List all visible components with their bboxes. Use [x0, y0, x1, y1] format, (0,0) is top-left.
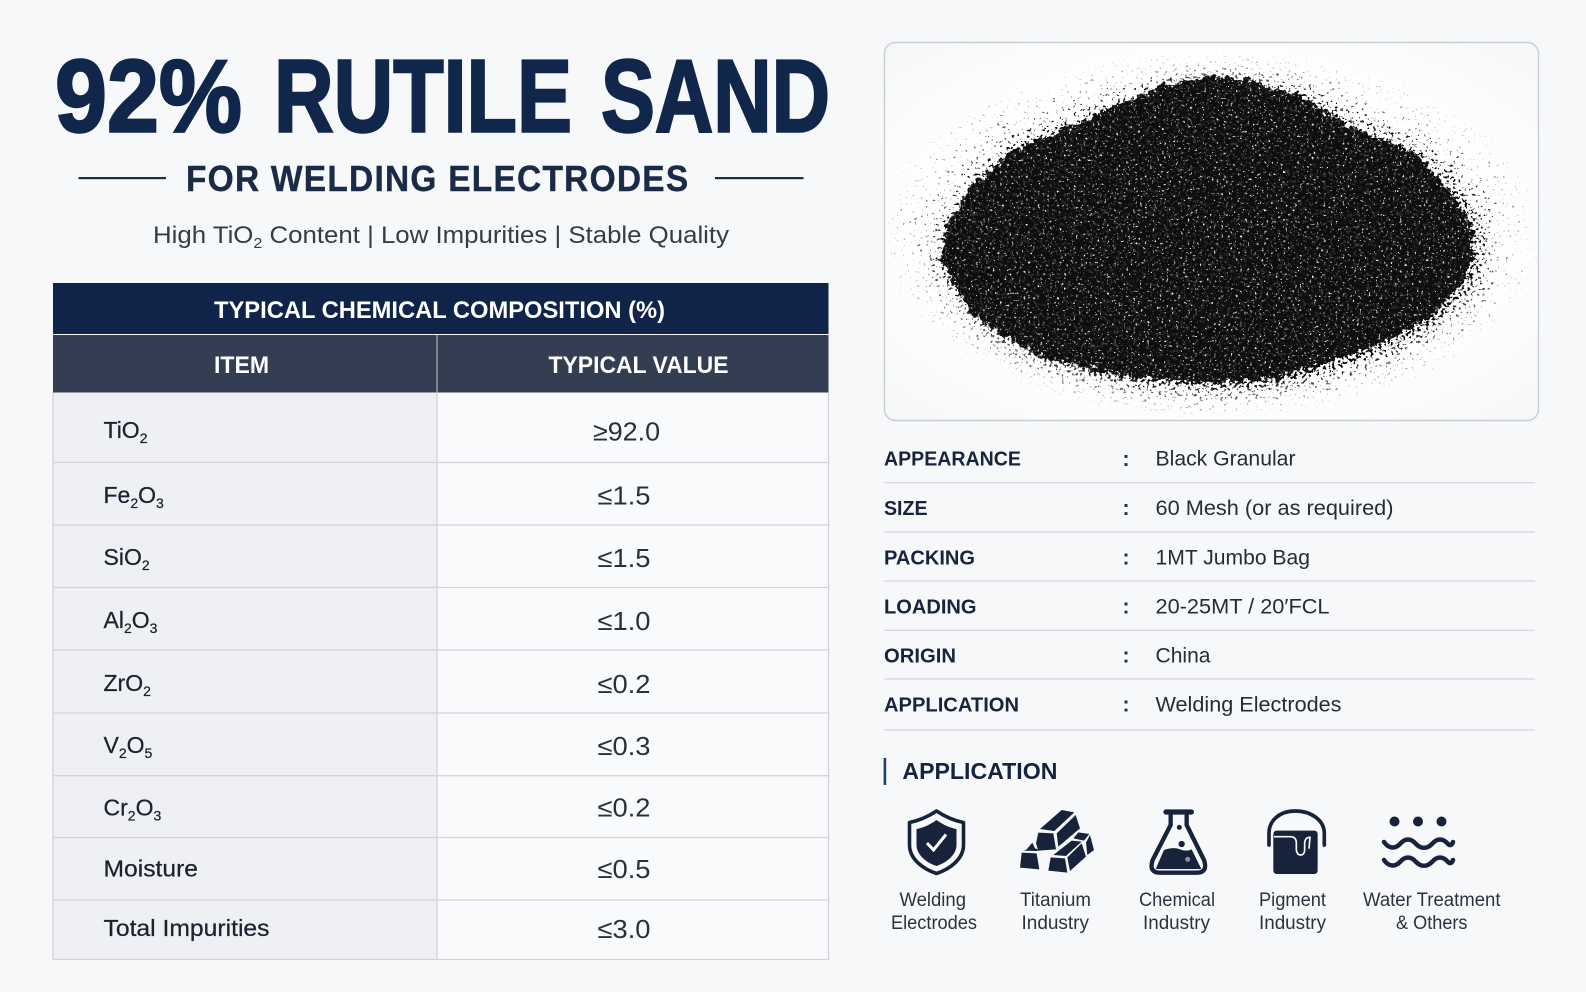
- row: Al2O3: Al: [104, 607, 124, 633]
- row: TiO2: ≥92.0: [593, 416, 660, 446]
- row: Al2O3: ≤1.0: [598, 606, 650, 636]
- row: V2O5: ≤0.3: [598, 731, 650, 761]
- item: pigment industry: Pigment: [1259, 890, 1327, 911]
- application heading: APPLICATION: [902, 758, 1057, 784]
- scattered grains: [948, 84, 1478, 384]
- subtitle with side rules: FOR WELDING ELECTRODES: [186, 160, 688, 199]
- row: TiO2: 2: [140, 430, 148, 446]
- row: Fe2O3: Fe: [104, 482, 130, 508]
- spec: appearance: APPEARANCE: [884, 449, 1021, 471]
- row: Al2O3: 2: [124, 620, 132, 636]
- title: [55, 38, 830, 154]
- title: SAND: [601, 38, 830, 154]
- row: ZrO2: 2: [143, 683, 151, 699]
- row: V2O5: V: [104, 732, 119, 758]
- spec: appearance: Black Granular: [1156, 448, 1296, 471]
- spec: size: :: [1122, 497, 1130, 520]
- table column headers: ITEM: [214, 352, 269, 379]
- spec: origin: China: [1156, 644, 1211, 667]
- table title bar: [53, 283, 828, 334]
- spec: appearance: [884, 448, 1296, 471]
- item: welding electrodes: Electrodes: [891, 913, 977, 934]
- tagline: 2: [253, 235, 262, 252]
- row: Fe2O3: 3: [156, 495, 164, 511]
- panel: chemical composition table: [53, 283, 828, 960]
- panel: product specifications: [884, 448, 1535, 730]
- spec: loading: :: [1122, 595, 1130, 618]
- item: chemical industry: Chemical: [1139, 890, 1215, 911]
- spec: application: [884, 694, 1342, 717]
- icon: flask: [1151, 812, 1205, 873]
- table column headers: TYPICAL VALUE: [548, 352, 728, 379]
- row: SiO2: ≤1.5: [598, 543, 650, 573]
- row: SiO2: [104, 543, 650, 573]
- title: RUTILE: [274, 38, 572, 154]
- row: Cr2O3: Cr: [104, 795, 128, 821]
- spec dividers: [884, 483, 1535, 730]
- row: V2O5: [104, 731, 650, 761]
- sand pile: [940, 76, 1475, 383]
- spec: origin: ORIGIN: [884, 645, 956, 667]
- spec: appearance: :: [1122, 448, 1130, 471]
- icon: shield with check: [910, 811, 964, 874]
- row: TiO2: TiO: [104, 417, 140, 443]
- row: Moisture: Moisture: [104, 856, 198, 882]
- row: SiO2: SiO: [104, 544, 142, 570]
- row: TiO2: [104, 416, 660, 446]
- spec: packing: PACKING: [884, 547, 975, 569]
- row: Al2O3: 3: [150, 620, 158, 636]
- item: water treatment: & Others: [1396, 913, 1468, 934]
- row: Moisture: [104, 854, 650, 884]
- item: chemical industry: Industry: [1143, 913, 1210, 934]
- tagline: High TiO: [153, 222, 246, 249]
- row: Total Impurities: [104, 914, 650, 944]
- row: Moisture: ≤0.5: [598, 854, 650, 884]
- row: Cr2O3: 3: [153, 808, 161, 824]
- row: Cr2O3: ≤0.2: [598, 793, 650, 823]
- row: Cr2O3: [104, 793, 650, 824]
- icon: metal ingots: [1020, 810, 1094, 873]
- title: 92%: [55, 38, 242, 154]
- row: Fe2O3: 2: [130, 495, 138, 511]
- row: Cr2O3: O: [136, 795, 153, 821]
- item: water treatment: [1363, 816, 1501, 934]
- row: SiO2: 2: [142, 557, 150, 573]
- table title bar: TYPICAL CHEMICAL COMPOSITION (%): [214, 297, 665, 324]
- item: welding electrodes: [891, 811, 977, 934]
- item: pigment industry: Industry: [1259, 913, 1326, 934]
- spec: loading: LOADING: [884, 596, 976, 618]
- row: V2O5: 2: [119, 745, 127, 761]
- spec: origin: :: [1122, 644, 1130, 667]
- row: Cr2O3: 2: [128, 808, 136, 824]
- item: titanium industry: [1020, 810, 1094, 934]
- spec: packing: :: [1122, 546, 1130, 569]
- row: Al2O3: [104, 606, 650, 636]
- item: welding electrodes: Welding: [900, 890, 966, 911]
- spec: origin: [884, 644, 1211, 667]
- row: Fe2O3: O: [138, 482, 156, 508]
- table body background and grid: [53, 392, 828, 960]
- row: Total Impurities: Total Impurities: [104, 915, 270, 941]
- icon: water waves and dots: [1384, 816, 1453, 866]
- tagline: Content | Low Impurities | Stable Quality: [262, 222, 729, 249]
- row: ZrO2: ZrO: [104, 670, 143, 696]
- spec: loading: [884, 595, 1330, 618]
- spec: application: Welding Electrodes: [1156, 694, 1342, 717]
- item: water treatment: Water Treatment: [1363, 890, 1501, 911]
- item: pigment industry: [1259, 811, 1327, 934]
- spec: packing: 1MT Jumbo Bag: [1156, 546, 1310, 569]
- item: titanium industry: Titanium: [1020, 890, 1091, 911]
- row: Total Impurities: ≤3.0: [598, 914, 650, 944]
- spec: size: [884, 497, 1394, 520]
- row: Al2O3: O: [132, 607, 150, 633]
- row: ZrO2: [104, 669, 650, 699]
- application icons row: [891, 810, 1501, 934]
- row: ZrO2: ≤0.2: [598, 669, 650, 699]
- table column headers: [53, 335, 828, 392]
- spec: packing: [884, 546, 1310, 569]
- row: Fe2O3: [104, 480, 650, 511]
- spec: application: APPLICATION: [884, 695, 1019, 717]
- item: titanium industry: Industry: [1022, 913, 1089, 934]
- panel: black sand photo: [884, 42, 1538, 420]
- spec: application: :: [1122, 694, 1130, 717]
- spec: size: 60 Mesh (or as required): [1156, 497, 1394, 520]
- row: V2O5: 5: [145, 745, 153, 761]
- spec: size: SIZE: [884, 498, 928, 520]
- item: chemical industry: [1139, 812, 1215, 934]
- icon: paint bucket: [1269, 811, 1324, 874]
- spec: loading: 20-25MT / 20′FCL: [1156, 595, 1330, 618]
- row: V2O5: O: [127, 732, 145, 758]
- row: Fe2O3: ≤1.5: [598, 480, 650, 510]
